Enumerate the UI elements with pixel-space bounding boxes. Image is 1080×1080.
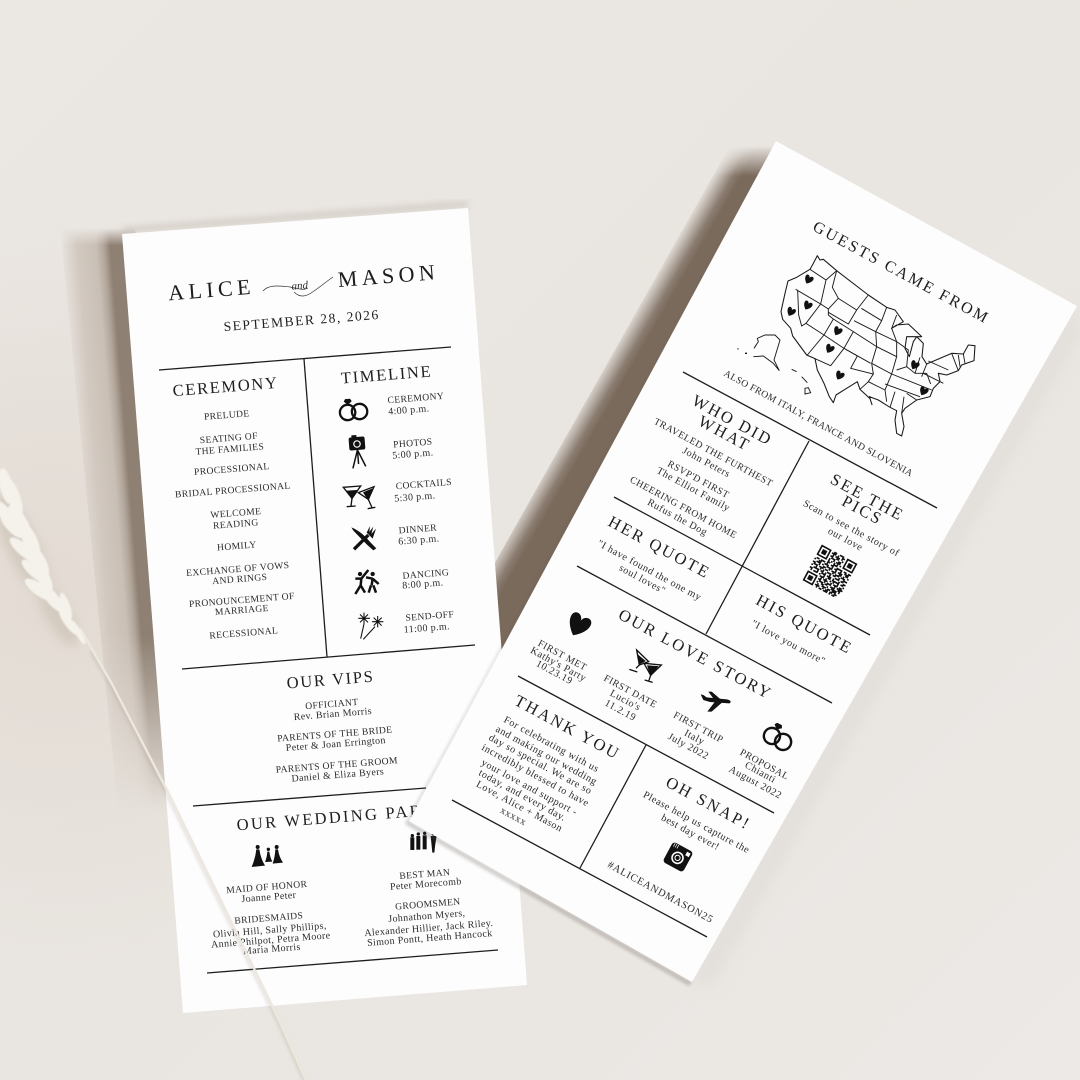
panel: thank you [474, 691, 624, 835]
panel: thank you: Love, Alice + Mason [474, 779, 564, 835]
panel: thank you: incredibly blessed to have [480, 742, 591, 809]
qr code [803, 545, 857, 599]
panel: his quote: "I love you more" [749, 618, 827, 667]
icon: camera on tripod [348, 434, 367, 469]
panel: ceremony: EXCHANGE OF VOWS [186, 560, 290, 579]
panel: our love story: Kathy's Party [528, 645, 588, 685]
panel: ceremony: THE FAMILIES [195, 441, 265, 458]
panel: see the pics: PICS [839, 491, 887, 529]
panel: our love story [528, 605, 797, 802]
panel: timeline: DINNER [398, 523, 438, 536]
panel: timeline: 5:30 p.m. [394, 490, 436, 505]
right card edge shadow [405, 141, 776, 986]
icon: knife and fork [351, 526, 376, 550]
icon: instagram camera [662, 841, 694, 873]
panel: ceremony: AND RINGS [212, 572, 268, 587]
panel: ceremony: BRIDAL PROCESSIONAL [175, 480, 291, 501]
right card: guest info [409, 141, 1077, 982]
icon: bridesmaids silhouette [252, 845, 283, 867]
panel: our wedding party: Maria Morris [243, 942, 301, 957]
panel: our vips: OUR VIPS [286, 667, 375, 692]
panel: her quote: HER QUOTE [605, 512, 714, 583]
panel: ceremony: PRELUDE [204, 408, 250, 423]
panel: our vips: Peter & Joan Errington [285, 735, 386, 754]
panel: see the pics: SEE THE [827, 469, 908, 525]
panel: who did what: TRAVELED THE FURTHEST [652, 416, 775, 489]
panel: see the pics [801, 469, 908, 599]
map: united states with hearts [737, 256, 975, 436]
icon: dancers [355, 570, 379, 594]
panel: oh snap: best day ever! [659, 813, 721, 853]
left card: ceremony program [122, 208, 527, 1013]
panel: our vips [275, 667, 398, 785]
heading: guests came from: GUESTS CAME FROM [810, 218, 992, 328]
panel: our love story: Chianti [743, 760, 778, 786]
panel: thank you: xxxxx [498, 805, 528, 828]
panel: her quote: "I have found the one my [595, 538, 703, 604]
card shadows [64, 148, 824, 972]
panel: timeline: TIMELINE [340, 361, 433, 388]
panel: ceremony: CEREMONY [172, 373, 279, 400]
panel: thank you: today, and every day. [477, 768, 568, 824]
panel: our love story: FIRST DATE [602, 673, 659, 711]
panel: timeline: CEREMONY [387, 391, 444, 406]
icon: airplane [701, 692, 731, 712]
panel: our wedding party: Alexander Hillier, Jack Riley. [364, 918, 494, 939]
panel: timeline: 8:00 p.m. [402, 577, 444, 592]
panel: thank you: and making our wedding [494, 724, 599, 788]
panel: our wedding party: Johnathon Myers, [388, 908, 466, 925]
panel: who did what [628, 391, 776, 541]
panel: our wedding party: Olivia Hill, Sally Phillips, [213, 921, 327, 940]
panel: timeline [339, 361, 454, 639]
panel: oh snap [605, 772, 754, 926]
panel: who did what: The Elliot Family [655, 466, 732, 514]
panel: our wedding party: BEST MAN [399, 867, 451, 882]
panel: timeline: DANCING [402, 567, 450, 582]
panel: our wedding party: GROOMSMEN [395, 896, 461, 913]
decoration: dried grass stem [0, 467, 306, 1080]
panel: our wedding party: Annie Philpot, Petra Moore [211, 930, 331, 951]
panel: our wedding party: MAID OF HONOR [226, 879, 308, 896]
panel: timeline: PHOTOS [393, 436, 433, 451]
panel: timeline: 6:30 p.m. [398, 533, 440, 548]
panel: our love story: August 2022 [727, 764, 783, 802]
panel: thank you: THANK YOU [511, 691, 624, 764]
panel: who did what: Rufus the Dog [645, 497, 709, 538]
panel: his quote: HIS QUOTE [753, 590, 856, 658]
panel: our wedding party: Joanne Peter [241, 890, 297, 905]
panel: our love story: Italy [682, 728, 707, 748]
panel: our wedding party: Simon Pontt, Heath Hancock [367, 928, 493, 949]
caption: also from: ALSO FROM ITALY, FRANCE AND SLOVENIA [722, 368, 915, 479]
panel: our vips: PARENTS OF THE BRIDE [277, 724, 393, 745]
panel: timeline: 11:00 p.m. [403, 621, 450, 636]
title: names: ALICE [167, 274, 256, 305]
panel: ceremony: RECESSIONAL [209, 625, 279, 642]
icon: cocktail glasses [343, 486, 375, 509]
panel: ceremony: READING [213, 517, 259, 532]
panel: ceremony: PROCESSIONAL [194, 461, 270, 478]
panel: our wedding party: BRIDESMAIDS [234, 910, 304, 927]
panel: her quote: soul loves" [617, 563, 667, 597]
panel: who did what: CHEERING FROM HOME [628, 474, 739, 541]
date: SEPTEMBER 28, 2026 [223, 307, 380, 334]
panel: see the pics: our love [826, 526, 865, 554]
panel: our love story: 11.2.19 [603, 698, 638, 724]
panel: who did what: WHO DID [689, 391, 776, 450]
icon: cocktail glasses [629, 650, 661, 682]
panel: thank you: your love and support - [479, 757, 579, 818]
icon: wedding rings [339, 397, 368, 421]
panel: thank you: day so special. We are so [487, 732, 594, 797]
panel: ceremony: WELCOME [210, 506, 262, 521]
panel: timeline: COCKTAILS [395, 477, 452, 492]
panel: our vips: PARENTS OF THE GROOM [275, 755, 398, 776]
map hearts [785, 274, 929, 397]
icon: proposal rings [761, 720, 797, 753]
panel: who did what: WHAT [695, 411, 754, 455]
panel: our wedding party: Peter Morecomb [390, 876, 462, 893]
panel: ceremony: PRONOUNCEMENT OF [189, 591, 295, 610]
title: names [167, 259, 440, 305]
panel: ceremony: HOMILY [217, 539, 257, 554]
title: names: MASON [337, 259, 440, 292]
panel: our love story: FIRST TRIP [671, 710, 725, 746]
panel: ceremony [172, 373, 295, 642]
panel: our love story: PROPOSAL [738, 747, 791, 783]
panel: our love story: FIRST MET [536, 638, 589, 674]
panel: ceremony: SEATING OF [199, 431, 258, 446]
map inset: alaska and hawaii [753, 335, 811, 394]
icon: sparklers [358, 613, 383, 639]
panel: our vips: Rev. Brian Morris [293, 706, 372, 723]
panel: who did what: John Peters [680, 445, 732, 480]
panel: timeline: 5:00 p.m. [392, 447, 434, 462]
panel: who did what: RSVP'D FIRST [665, 459, 731, 501]
divider lines [159, 347, 498, 973]
panel: see the pics: Scan to see the story of [801, 498, 901, 559]
panel: oh snap: Please help us capture the [641, 790, 751, 856]
panel: timeline: SEND-OFF [405, 609, 454, 624]
title: names: and [291, 279, 309, 293]
panel: our love story: OUR LOVE STORY [615, 605, 776, 703]
panel: our wedding party [211, 799, 494, 957]
panel: our vips: OFFICIANT [305, 697, 359, 712]
panel: oh snap: #ALICEANDMASON25 [605, 860, 715, 926]
panel: our love story: Lucio's [608, 688, 643, 714]
icon: groomsmen silhouette [410, 832, 437, 853]
panel: our vips: Daniel & Eliza Byers [291, 766, 384, 785]
panel: ceremony: MARRIAGE [214, 603, 269, 618]
panel: timeline: 4:00 p.m. [388, 403, 430, 418]
panel: oh snap: OH SNAP! [663, 772, 754, 834]
panel: our love story: 10.23.19 [534, 658, 574, 687]
panel: our love story: July 2022 [666, 731, 711, 762]
icon: heart [563, 611, 593, 640]
panel: thank you: For celebrating with us [502, 715, 601, 775]
panel: our wedding party: OUR WEDDING PARTY [236, 799, 449, 834]
divider lines [452, 372, 937, 937]
